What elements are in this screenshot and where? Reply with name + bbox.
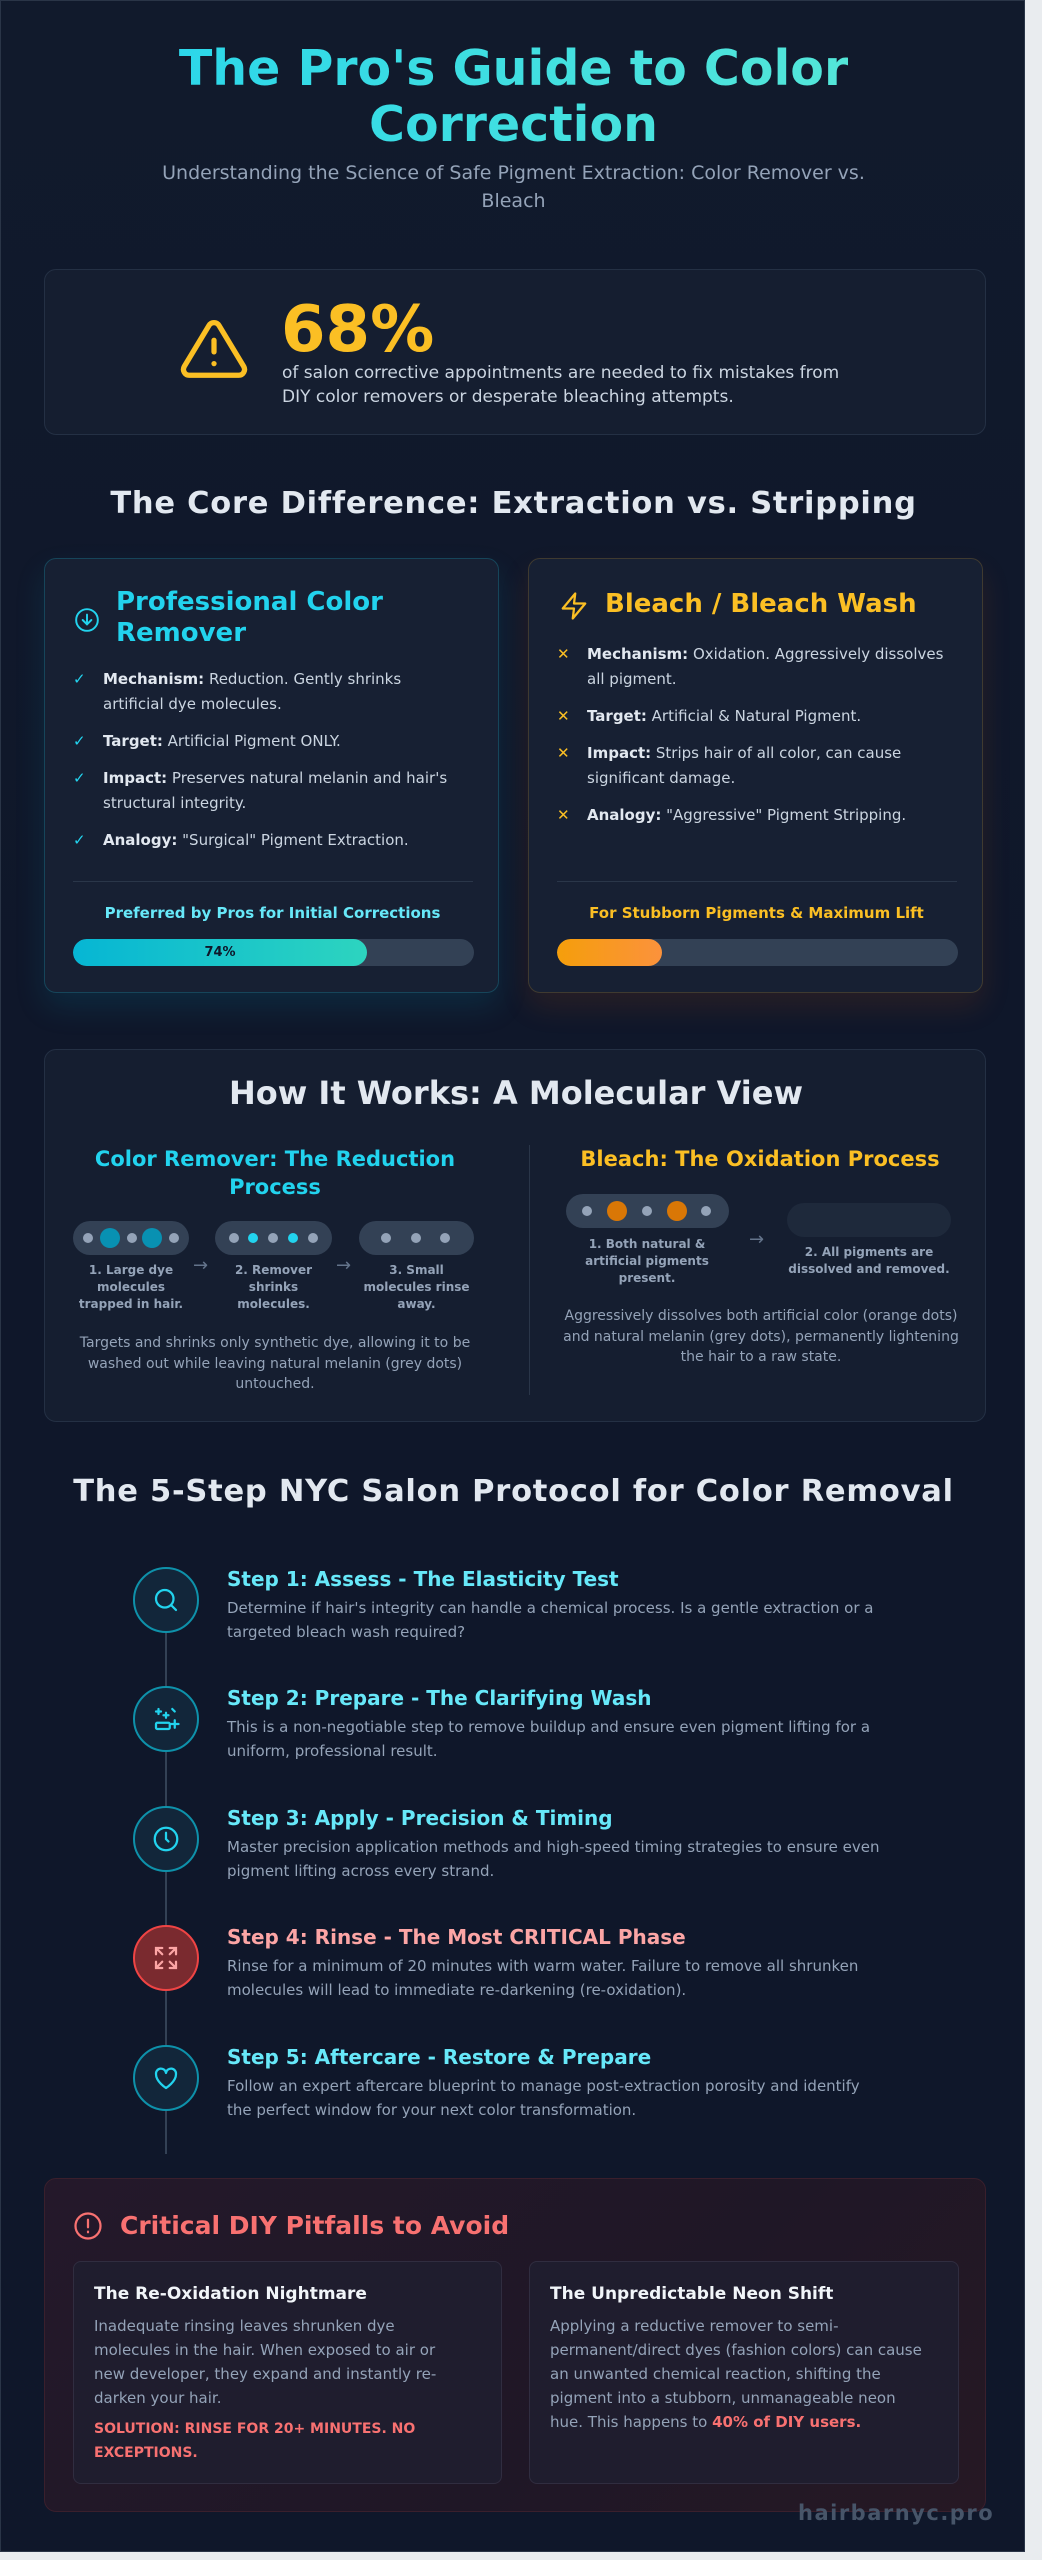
title: Correction: [369, 96, 658, 153]
step 1: Step 1: Assess - The Elasticity Test: [227, 1567, 619, 1591]
captions: 1. Both natural & artificial pigments present.: [585, 1237, 709, 1285]
step 2: Step 2: Prepare - The Clarifying Wash: [227, 1686, 652, 1710]
subpanel: oxidation: [563, 1147, 959, 1365]
title: [1, 41, 1026, 153]
subheading: Color Remover: The Reduction Process: [95, 1147, 455, 1199]
bullet list: Analogy: "Aggressive" Pigment Stripping.: [587, 806, 906, 824]
bullet list: Target: Artificial Pigment ONLY.: [103, 732, 341, 750]
icon: clock: [133, 1806, 199, 1872]
bullet list: Analogy: "Surgical" Pigment Extraction.: [103, 831, 409, 849]
card title: Remover: [116, 618, 246, 648]
icon: expand arrows: [133, 1925, 199, 1991]
subpanel: reduction: 2. Remover shrinks molecules.: [235, 1263, 312, 1311]
bullet list: ✓: [73, 769, 86, 787]
card: neon shift: The Unpredictable Neon Shift: [550, 2284, 833, 2304]
arrow: →: [749, 1229, 764, 1250]
progress bar 74%: [73, 939, 474, 966]
subtitle: Understanding the Science of Safe Pigment Extraction: Color Remover vs. Bleach: [162, 162, 865, 212]
bullet list: ✕: [557, 645, 570, 663]
bullet list: Mechanism: Oxidation. Aggressively dissolves all pigment.: [587, 645, 943, 688]
panel: DIY pitfalls: [44, 2178, 986, 2512]
icon: search: [133, 1567, 199, 1633]
step 5: the perfect window for your next color transformation.: [227, 2101, 636, 2119]
pill 1: [566, 1194, 729, 1228]
subpanel: reduction: 3. Small molecules rinse away.: [363, 1263, 470, 1311]
step 1: Determine if hair's integrity can handle a chemical process. Is a gentle extraction or a targeted bleach wash required?: [227, 1599, 873, 1641]
card title: [116, 587, 383, 648]
card: neon shift: [529, 2261, 959, 2484]
bullet list: ✕: [557, 806, 570, 824]
step 3: [133, 1806, 880, 1880]
heading: 5-step protocol: The 5-Step NYC Salon Protocol for Color Removal: [73, 1474, 954, 1509]
step 5: [133, 2045, 860, 2119]
icon: sparkle wash: [133, 1686, 199, 1752]
card: re-oxidation: [73, 2261, 502, 2484]
subheading: Bleach: The Oxidation Process: [580, 1147, 940, 1171]
bullet list: Impact: Preserves natural melanin and hair's structural integrity.: [103, 769, 447, 812]
title: The Pro's Guide to Color: [179, 40, 848, 97]
card title: Professional Color: [116, 587, 383, 617]
bullet list: ✕: [557, 744, 570, 762]
bullet list: [557, 645, 943, 824]
watermark: hairbarnyc.pro: [798, 2501, 994, 2525]
pill 1: [73, 1221, 189, 1255]
bullet list: ✓: [73, 732, 86, 750]
card: re-oxidation: Inadequate rinsing leaves shrunken dye molecules in the hair. When exposed to air or new developer, they expand and instantly re-darken your hair.: [94, 2317, 436, 2407]
card: re-oxidation: SOLUTION: RINSE FOR 20+ MINUTES. NO EXCEPTIONS.: [94, 2421, 415, 2461]
step 4: [133, 1925, 858, 1999]
step 5: Step 5: Aftercare - Restore & Prepare: [227, 2045, 651, 2069]
description: Targets and shrinks only synthetic dye, allowing it to be washed out while leaving natural melanin (grey dots) untouched.: [80, 1335, 470, 1392]
card title: Bleach / Bleach Wash: [605, 589, 917, 619]
pill 3: [359, 1221, 474, 1255]
bullet list: Target: Artificial & Natural Pigment.: [587, 707, 861, 725]
pill 2 empty: [787, 1203, 951, 1237]
panel: bleach: [528, 558, 983, 993]
step 3: Step 3: Apply - Precision & Timing: [227, 1806, 613, 1830]
arrows: →: [193, 1255, 208, 1276]
heading: core difference: The Core Difference: Extraction vs. Stripping: [110, 486, 917, 521]
step 5: Follow an expert aftercare blueprint to manage post-extraction porosity and identify: [227, 2077, 860, 2095]
bullet list: ✓: [73, 670, 86, 688]
icon: warning: [180, 320, 248, 378]
card: neon shift: Applying a reductive remover to semi-permanent/direct dyes (fashion colors) can cause an unwanted chemical reaction, shifting the pigment into a stubborn, unmanageable neon hue. This happens to 40% of DIY users.: [550, 2317, 922, 2431]
card: re-oxidation: The Re-Oxidation Nightmare: [94, 2284, 367, 2304]
description: Aggressively dissolves both artificial color (orange dots) and natural melanin (grey dots), permanently lightening the hair to a raw state.: [563, 1308, 959, 1365]
icon: heart: [133, 2045, 199, 2111]
icon: bolt: [562, 592, 586, 620]
heading: How It Works: A Molecular View: [229, 1074, 803, 1112]
bullet list: Mechanism: Reduction. Gently shrinks artificial dye molecules.: [103, 670, 401, 713]
bullet list: ✕: [557, 707, 570, 725]
step 4: Rinse for a minimum of 20 minutes with warm water. Failure to remove all shrunken molecules will lead to immediate re-darkening (re-oxidation).: [227, 1957, 858, 1999]
stat number: 68%: [281, 293, 434, 367]
stat callout: [44, 269, 986, 435]
icon: alert circle: [74, 2212, 102, 2240]
step 3: Master precision application methods and high-speed timing strategies to ensure even pigment lifting across every strand.: [227, 1838, 880, 1880]
subpanel: reduction: [73, 1147, 474, 1392]
step 2: This is a non-negotiable step to remove buildup and ensure even pigment lifting for a uniform, professional result.: [227, 1718, 870, 1760]
timeline: [133, 1567, 880, 2154]
panel: professional color remover: [44, 558, 499, 993]
panel: molecular view: [44, 1049, 986, 1422]
heading: Critical DIY Pitfalls to Avoid: [120, 2211, 509, 2240]
progress bar 74%: 74%: [204, 945, 236, 960]
subpanel: oxidation: 2. All pigments are dissolved and removed.: [788, 1245, 950, 1276]
step 1: [133, 1567, 873, 1641]
step 2: [133, 1686, 870, 1760]
captions: 1. Large dye molecules trapped in hair.: [79, 1263, 183, 1311]
bullet list: ✓: [73, 831, 86, 849]
footer label: Preferred by Pros for Initial Corrections: [105, 904, 440, 922]
step 4: Step 4: Rinse - The Most CRITICAL Phase: [227, 1925, 686, 1949]
icon: down circle: [75, 608, 99, 632]
subpanel: reduction: →: [336, 1255, 351, 1276]
pill 2: [215, 1221, 332, 1255]
progress bar: [557, 939, 958, 966]
footer label: For Stubborn Pigments & Maximum Lift: [589, 904, 924, 922]
bullet list: [73, 670, 447, 849]
stat text: of salon corrective appointments are needed to fix mistakes from DIY color removers or desperate bleaching attempts.: [282, 363, 839, 407]
bullet list: Impact: Strips hair of all color, can cause significant damage.: [587, 744, 901, 787]
